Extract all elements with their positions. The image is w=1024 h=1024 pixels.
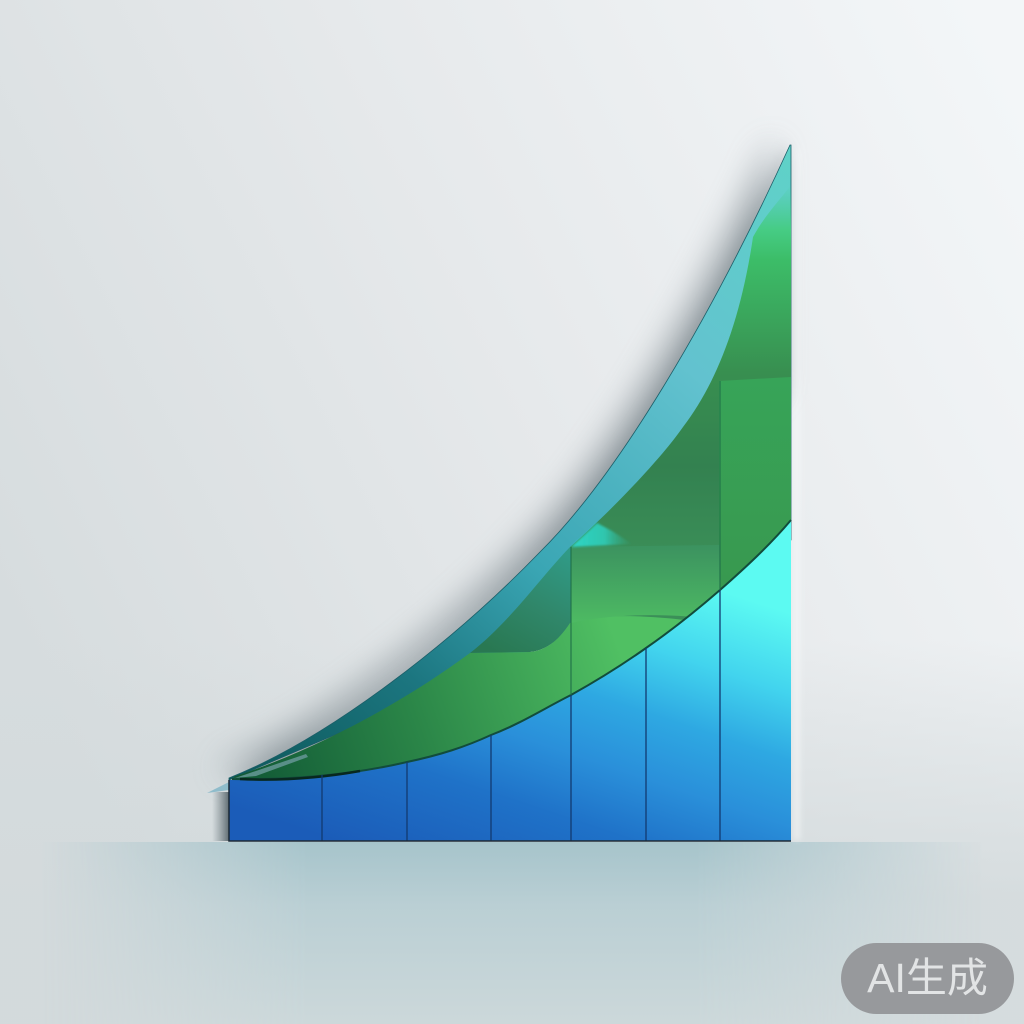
highlight sliver at curve start <box>235 754 308 778</box>
dark green layer <box>560 185 791 700</box>
outer teal curve layer <box>229 145 791 780</box>
AI badge <box>841 943 1014 1014</box>
dark teal-green hump area <box>470 547 574 653</box>
middle green bar <box>571 545 720 623</box>
lower green layer <box>233 616 720 790</box>
upper green bar <box>719 377 791 600</box>
cyan highlight on step <box>571 523 632 547</box>
shadow behind curve <box>207 137 786 841</box>
AI badge: AI生成 <box>867 955 988 1001</box>
blue bars <box>229 381 791 841</box>
